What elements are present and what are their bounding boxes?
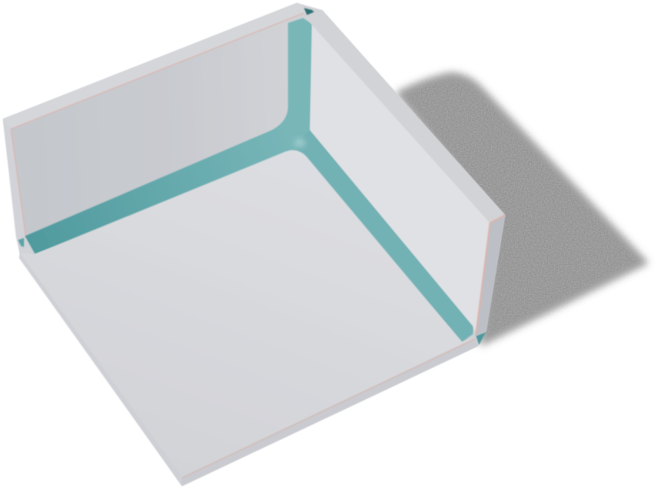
right wall outer side face xyxy=(475,215,505,336)
floor front side face xyxy=(182,338,478,486)
channel vertical run xyxy=(284,18,316,149)
small teal corner right xyxy=(476,332,486,345)
teal channel xyxy=(18,18,473,342)
right wall inner face xyxy=(310,24,490,334)
right wall top strip xyxy=(306,10,505,223)
cast shadow xyxy=(396,73,648,346)
right wall xyxy=(304,8,505,345)
right wall pink rim xyxy=(476,215,505,334)
wall pink rim xyxy=(11,13,304,238)
floor left side face xyxy=(19,253,182,486)
floor top xyxy=(20,150,475,477)
wall outer side face xyxy=(3,119,35,254)
floor pink rim xyxy=(182,339,475,478)
tray base fill xyxy=(3,3,505,486)
channel highlight xyxy=(295,139,305,147)
small dark corner top xyxy=(304,8,314,15)
back-left wall xyxy=(3,3,307,254)
small teal corner left xyxy=(18,238,24,247)
wall top face xyxy=(3,3,307,129)
wall inner face xyxy=(11,20,288,238)
channel left run xyxy=(25,24,312,254)
floor slab xyxy=(19,150,478,486)
channel right run xyxy=(296,130,473,342)
